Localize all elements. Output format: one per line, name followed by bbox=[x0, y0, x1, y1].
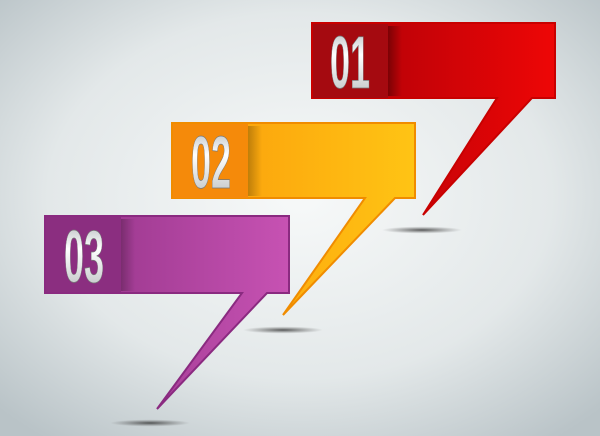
callout 02 bbox=[172, 122, 415, 315]
callout 01 bbox=[312, 22, 555, 215]
number 01: 01 bbox=[330, 22, 370, 105]
number 02: 02 bbox=[191, 122, 231, 205]
shadow 3 bbox=[110, 420, 190, 426]
number 03: 03 bbox=[64, 216, 104, 299]
shadow 2 bbox=[243, 326, 323, 334]
shadow 1 bbox=[382, 226, 462, 234]
callout 03 bbox=[45, 216, 289, 409]
